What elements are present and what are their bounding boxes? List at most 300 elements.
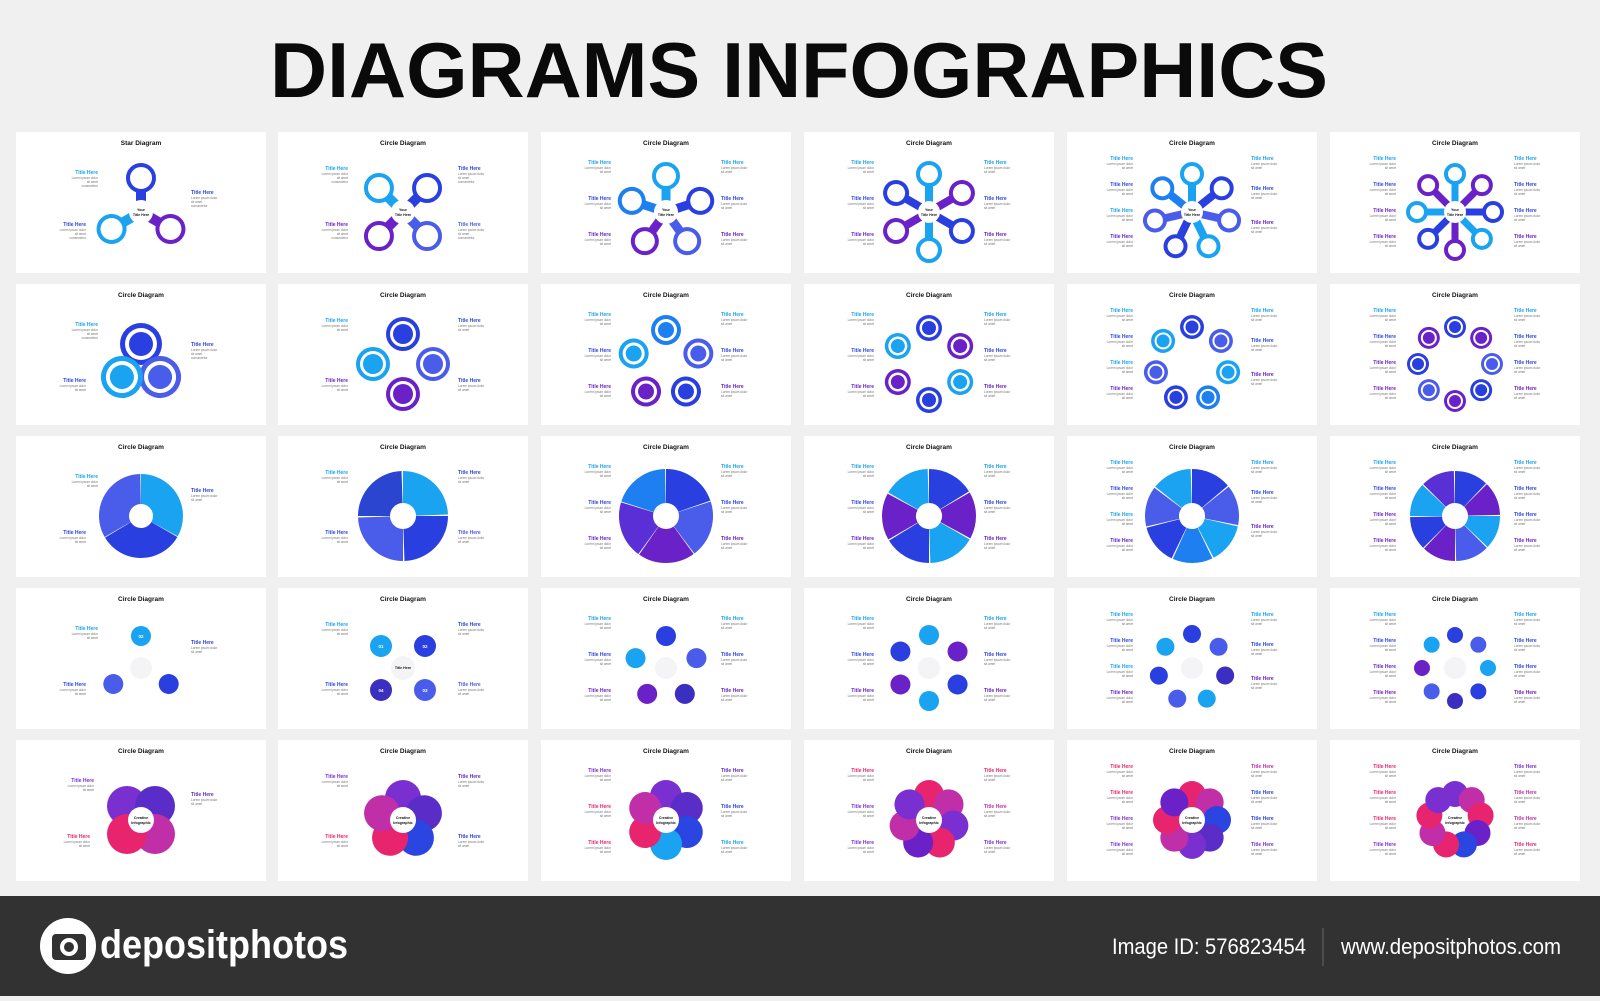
labels: sit amet (1514, 370, 1525, 374)
diagram: Creative (659, 816, 673, 820)
labels: Lorem ipsum dolor (322, 688, 349, 692)
labels: Title Here (1110, 182, 1133, 188)
diagram (881, 163, 977, 261)
diagram: Title Here (133, 213, 149, 217)
labels: sit amet (600, 626, 611, 630)
labels: sit amet (984, 170, 995, 174)
labels: Title Here (191, 190, 214, 196)
labels: Lorem ipsum dolor (458, 780, 485, 784)
labels: sit amet (337, 540, 348, 544)
diagram (1150, 474, 1234, 558)
labels: Title Here (1373, 386, 1396, 392)
labels: sit amet (1122, 166, 1133, 170)
labels: sit amet (1122, 774, 1133, 778)
labels: Lorem ipsum dolor (191, 196, 218, 200)
labels: Lorem ipsum dolor (1514, 770, 1541, 774)
diagram: 04 (378, 688, 384, 693)
labels: sit amet (1514, 166, 1525, 170)
labels: Title Here (851, 536, 874, 542)
labels: sit amet (337, 328, 348, 332)
labels: Title Here (1514, 386, 1537, 392)
labels: Title Here (588, 160, 611, 166)
labels: Title Here (721, 768, 744, 774)
labels: Lorem ipsum dolor (1107, 162, 1134, 166)
labels: consectetur (332, 180, 349, 184)
labels: sit amet (1514, 800, 1525, 804)
labels: Lorem ipsum dolor (1251, 822, 1278, 826)
labels: Title Here (588, 768, 611, 774)
labels: Title Here (325, 470, 348, 476)
labels: Title Here (63, 530, 86, 536)
labels: Title Here (458, 378, 481, 384)
diagram (1414, 627, 1496, 709)
labels: Title Here (984, 464, 1007, 470)
diagram: Your (137, 208, 146, 212)
labels: Title Here (1251, 460, 1274, 466)
labels: Title Here (1110, 308, 1133, 314)
labels: Title Here (191, 792, 214, 798)
labels: sit amet (1514, 648, 1525, 652)
labels (322, 622, 485, 696)
labels: Title Here (1110, 664, 1133, 670)
diagram: Title Here (395, 666, 411, 670)
url: www.depositphotos.com (1340, 934, 1561, 959)
labels: Title Here (1110, 690, 1133, 696)
labels: Title Here (984, 616, 1007, 622)
labels: Title Here (1110, 816, 1133, 822)
labels: consectetur (191, 204, 208, 208)
labels: Title Here (721, 464, 744, 470)
labels: Lorem ipsum dolor (721, 506, 748, 510)
labels: sit amet (600, 474, 611, 478)
labels: Title Here (721, 160, 744, 166)
labels (848, 616, 1011, 702)
labels (322, 470, 485, 544)
labels: Title Here (588, 348, 611, 354)
labels: Title Here (325, 222, 348, 228)
labels (322, 774, 485, 848)
labels: consectetur (82, 336, 99, 340)
labels: Lorem ipsum dolor (1370, 392, 1397, 396)
labels: Lorem ipsum dolor (1251, 192, 1278, 196)
labels: Title Here (325, 834, 348, 840)
labels: Lorem ipsum dolor (191, 798, 218, 802)
labels: sit amet (75, 692, 86, 696)
labels: sit amet (600, 394, 611, 398)
labels: sit amet (337, 844, 348, 848)
diagram: Infographic (1445, 821, 1465, 825)
labels: sit amet (337, 232, 348, 236)
labels: Lorem ipsum dolor (848, 390, 875, 394)
labels: sit amet (337, 176, 348, 180)
labels: Title Here (1373, 690, 1396, 696)
labels: Title Here (191, 640, 214, 646)
card title: Circle Diagram (1169, 596, 1215, 603)
card: ring circles 3 (16, 284, 266, 425)
labels: Title Here (1251, 338, 1274, 344)
labels: Title Here (71, 778, 94, 784)
labels: Lorem ipsum dolor (1251, 496, 1278, 500)
labels: Title Here (1373, 182, 1396, 188)
labels: Title Here (325, 530, 348, 536)
labels: sit amet (1122, 622, 1133, 626)
labels: sit amet (1251, 230, 1262, 234)
card: flower 8 (1067, 740, 1317, 881)
labels: sit amet (83, 788, 94, 792)
labels: sit amet (600, 170, 611, 174)
labels: Lorem ipsum dolor (1107, 796, 1134, 800)
labels: Lorem ipsum dolor (1107, 366, 1134, 370)
labels: Lorem ipsum dolor (585, 658, 612, 662)
labels: sit amet (863, 394, 874, 398)
labels: consectetur (191, 356, 208, 360)
labels: Lorem ipsum dolor (848, 470, 875, 474)
labels: sit amet (984, 778, 995, 782)
card title: Circle Diagram (118, 292, 164, 299)
labels (848, 312, 1011, 398)
labels: Title Here (1373, 816, 1396, 822)
labels: Title Here (1251, 220, 1274, 226)
labels: sit amet (863, 358, 874, 362)
labels: Lorem ipsum dolor (721, 166, 748, 170)
icon: depositphotos logo (40, 918, 96, 974)
labels: Title Here (1110, 360, 1133, 366)
labels: Lorem ipsum dolor (1107, 188, 1134, 192)
card title: Circle Diagram (1169, 444, 1215, 451)
card title: Circle Diagram (906, 596, 952, 603)
labels: Lorem ipsum dolor (322, 324, 349, 328)
labels: sit amet (1514, 244, 1525, 248)
labels: sit amet (87, 332, 98, 336)
labels: Title Here (1251, 612, 1274, 618)
labels: Title Here (1373, 460, 1396, 466)
labels: sit amet (1514, 774, 1525, 778)
diagram: Your (662, 208, 671, 212)
labels: Lorem ipsum dolor (1251, 770, 1278, 774)
labels: sit amet (191, 352, 202, 356)
labels: Title Here (1110, 386, 1133, 392)
card: circle swirl 4 (278, 132, 528, 273)
image id: Image ID: 576823454 (1112, 934, 1306, 959)
labels: Lorem ipsum dolor (1514, 848, 1541, 852)
labels: sit amet (1514, 548, 1525, 552)
labels: Lorem ipsum dolor (848, 318, 875, 322)
diagram: 02 (138, 634, 144, 639)
labels: sit amet (600, 510, 611, 514)
labels: Title Here (1110, 156, 1133, 162)
card title: Circle Diagram (643, 748, 689, 755)
labels: Lorem ipsum dolor (721, 238, 748, 242)
labels: Lorem ipsum dolor (848, 846, 875, 850)
labels: sit amet (863, 510, 874, 514)
labels: Title Here (1514, 486, 1537, 492)
labels: Title Here (984, 500, 1007, 506)
labels: sit amet (984, 662, 995, 666)
labels: sit amet (1385, 244, 1396, 248)
labels: Lorem ipsum dolor (1514, 240, 1541, 244)
labels (322, 318, 485, 392)
labels: Lorem ipsum dolor (1370, 240, 1397, 244)
labels: sit amet (1251, 500, 1262, 504)
labels: Lorem ipsum dolor (984, 202, 1011, 206)
labels: sit amet (863, 778, 874, 782)
labels: sit amet (1122, 852, 1133, 856)
diagram (1153, 781, 1231, 859)
card title: Circle Diagram (643, 596, 689, 603)
labels: Title Here (1251, 642, 1274, 648)
labels: Lorem ipsum dolor (1514, 518, 1541, 522)
card: donut 4 (278, 436, 528, 577)
labels: Lorem ipsum dolor (1514, 466, 1541, 470)
labels: Lorem ipsum dolor (984, 238, 1011, 242)
labels: sit amet (337, 632, 348, 636)
labels: Lorem ipsum dolor (848, 774, 875, 778)
labels: Title Here (851, 196, 874, 202)
labels (1370, 612, 1541, 704)
labels: Title Here (458, 834, 481, 840)
labels: sit amet (87, 180, 98, 184)
card title: Circle Diagram (1169, 292, 1215, 299)
labels: Title Here (1514, 690, 1537, 696)
labels: sit amet (600, 850, 611, 854)
labels: Title Here (1373, 764, 1396, 770)
labels: Title Here (588, 464, 611, 470)
labels: Title Here (984, 196, 1007, 202)
labels: sit amet (1122, 700, 1133, 704)
card: circle swirl 6 (804, 132, 1054, 273)
diagram: Your (1451, 208, 1460, 212)
labels: sit amet (984, 358, 995, 362)
labels: Lorem ipsum dolor (1107, 392, 1134, 396)
labels: sit amet (458, 784, 469, 788)
card title: Circle Diagram (906, 292, 952, 299)
labels: Title Here (1251, 308, 1274, 314)
labels: Lorem ipsum dolor (458, 384, 485, 388)
labels: sit amet (1122, 826, 1133, 830)
diagram (880, 315, 978, 413)
diagram: Infographic (919, 821, 939, 825)
labels: Lorem ipsum dolor (585, 390, 612, 394)
card: flower 4 (16, 740, 266, 881)
labels: Title Here (1514, 790, 1537, 796)
diagram (617, 164, 715, 258)
labels: Lorem ipsum dolor (458, 172, 485, 176)
card: dots 8 (1330, 588, 1580, 729)
labels: Title Here (984, 652, 1007, 658)
card title: Circle Diagram (906, 140, 952, 147)
labels: sit amet (458, 540, 469, 544)
labels: Title Here (984, 384, 1007, 390)
labels: Title Here (1514, 664, 1537, 670)
labels: sit amet (1251, 652, 1262, 656)
card: donut 7 (1067, 436, 1317, 577)
labels: Lorem ipsum dolor (984, 658, 1011, 662)
labels: Lorem ipsum dolor (458, 628, 485, 632)
labels: sit amet (721, 242, 732, 246)
labels: sit amet (721, 814, 732, 818)
labels: Lorem ipsum dolor (1370, 670, 1397, 674)
labels: sit amet (87, 636, 98, 640)
labels: Lorem ipsum dolor (1107, 544, 1134, 548)
labels: sit amet (1385, 166, 1396, 170)
labels: Title Here (1110, 334, 1133, 340)
labels: sit amet (1251, 534, 1262, 538)
labels: sit amet (1514, 674, 1525, 678)
labels: Lorem ipsum dolor (585, 202, 612, 206)
labels: sit amet (1514, 318, 1525, 322)
card title: Circle Diagram (118, 748, 164, 755)
labels: sit amet (1514, 192, 1525, 196)
diagram (624, 474, 708, 558)
diagram: Your (399, 208, 408, 212)
labels: sit amet (1122, 244, 1133, 248)
labels: sit amet (1385, 800, 1396, 804)
labels: sit amet (721, 206, 732, 210)
labels: Lorem ipsum dolor (322, 536, 349, 540)
labels: Title Here (63, 378, 86, 384)
labels: Lorem ipsum dolor (1251, 648, 1278, 652)
labels: Lorem ipsum dolor (1107, 696, 1134, 700)
labels: sit amet (1385, 470, 1396, 474)
labels: Lorem ipsum dolor (68, 784, 95, 788)
labels: Title Here (1514, 182, 1537, 188)
labels: sit amet (863, 206, 874, 210)
labels: Lorem ipsum dolor (848, 542, 875, 546)
card: flower 7 (804, 740, 1054, 881)
labels: Title Here (1373, 612, 1396, 618)
labels: Lorem ipsum dolor (458, 324, 485, 328)
card title: Circle Diagram (906, 444, 952, 451)
labels: sit amet (191, 650, 202, 654)
labels: Lorem ipsum dolor (60, 228, 87, 232)
card: dots 5 (541, 588, 791, 729)
diagram (1143, 164, 1241, 260)
labels: Lorem ipsum dolor (1370, 848, 1397, 852)
labels: Lorem ipsum dolor (1251, 682, 1278, 686)
diagram (107, 786, 175, 854)
labels: sit amet (1514, 344, 1525, 348)
labels: Title Here (75, 474, 98, 480)
labels (1370, 764, 1541, 856)
labels: Lorem ipsum dolor (1370, 696, 1397, 700)
labels: sit amet (1122, 470, 1133, 474)
labels (848, 160, 1011, 246)
labels: Title Here (458, 470, 481, 476)
labels: Title Here (1251, 676, 1274, 682)
labels: Lorem ipsum dolor (1370, 162, 1397, 166)
labels: Title Here (191, 342, 214, 348)
labels: Title Here (984, 840, 1007, 846)
labels: consectetur (458, 180, 475, 184)
labels: Title Here (1110, 612, 1133, 618)
card: dots 3 (16, 588, 266, 729)
labels: Title Here (1251, 490, 1274, 496)
labels: Lorem ipsum dolor (585, 810, 612, 814)
diagram (623, 780, 709, 860)
labels: Lorem ipsum dolor (458, 476, 485, 480)
labels: sit amet (984, 546, 995, 550)
labels: sit amet (1385, 826, 1396, 830)
diagram: Infographic (131, 821, 151, 825)
labels: Lorem ipsum dolor (191, 494, 218, 498)
labels: sit amet (458, 232, 469, 236)
labels (848, 464, 1011, 550)
labels: Title Here (984, 348, 1007, 354)
labels: Title Here (1514, 538, 1537, 544)
labels: Title Here (1251, 764, 1274, 770)
card: star diagram 3 (16, 132, 266, 273)
labels: Lorem ipsum dolor (1514, 618, 1541, 622)
labels: Title Here (1514, 234, 1537, 240)
labels: sit amet (863, 170, 874, 174)
labels (60, 626, 218, 696)
labels: Lorem ipsum dolor (1514, 366, 1541, 370)
labels: Lorem ipsum dolor (585, 354, 612, 358)
labels: Lorem ipsum dolor (1107, 240, 1134, 244)
labels: consectetur (70, 236, 87, 240)
labels: sit amet (1514, 826, 1525, 830)
labels: Lorem ipsum dolor (1370, 518, 1397, 522)
labels: sit amet (1385, 344, 1396, 348)
diagram (94, 165, 188, 247)
card title: Circle Diagram (380, 596, 426, 603)
labels: Title Here (984, 536, 1007, 542)
labels: Lorem ipsum dolor (1514, 340, 1541, 344)
labels: Title Here (851, 500, 874, 506)
labels: Title Here (325, 682, 348, 688)
diagram (1142, 315, 1242, 413)
labels: sit amet (863, 850, 874, 854)
labels: sit amet (1514, 522, 1525, 526)
labels: Title Here (1514, 460, 1537, 466)
labels: Title Here (984, 688, 1007, 694)
labels: Lorem ipsum dolor (1251, 226, 1278, 230)
labels: Lorem ipsum dolor (322, 476, 349, 480)
diagram: Creative (134, 816, 148, 820)
card: dots 7 (1067, 588, 1317, 729)
labels: Lorem ipsum dolor (984, 506, 1011, 510)
labels: Title Here (325, 166, 348, 172)
labels (1370, 460, 1541, 552)
labels: sit amet (1385, 700, 1396, 704)
diagram (1408, 165, 1502, 259)
labels: Lorem ipsum dolor (1107, 848, 1134, 852)
labels: Lorem ipsum dolor (721, 202, 748, 206)
diagram: Title Here (1447, 213, 1463, 217)
labels (1107, 460, 1278, 552)
card: donut 5 (541, 436, 791, 577)
labels: Lorem ipsum dolor (1107, 618, 1134, 622)
labels: Title Here (721, 688, 744, 694)
labels: Title Here (851, 160, 874, 166)
labels: sit amet (600, 662, 611, 666)
card title: Circle Diagram (380, 748, 426, 755)
labels: Title Here (721, 536, 744, 542)
labels: Title Here (1514, 612, 1537, 618)
labels: Lorem ipsum dolor (1514, 822, 1541, 826)
labels: sit amet (1251, 470, 1262, 474)
labels: Title Here (588, 688, 611, 694)
labels: sit amet (1514, 622, 1525, 626)
labels: Lorem ipsum dolor (458, 688, 485, 692)
diagram (1414, 475, 1496, 557)
diagram: 02 (422, 644, 428, 649)
labels: sit amet (600, 546, 611, 550)
labels: sit amet (721, 662, 732, 666)
labels: sit amet (863, 242, 874, 246)
labels: Lorem ipsum dolor (848, 238, 875, 242)
labels: sit amet (458, 692, 469, 696)
